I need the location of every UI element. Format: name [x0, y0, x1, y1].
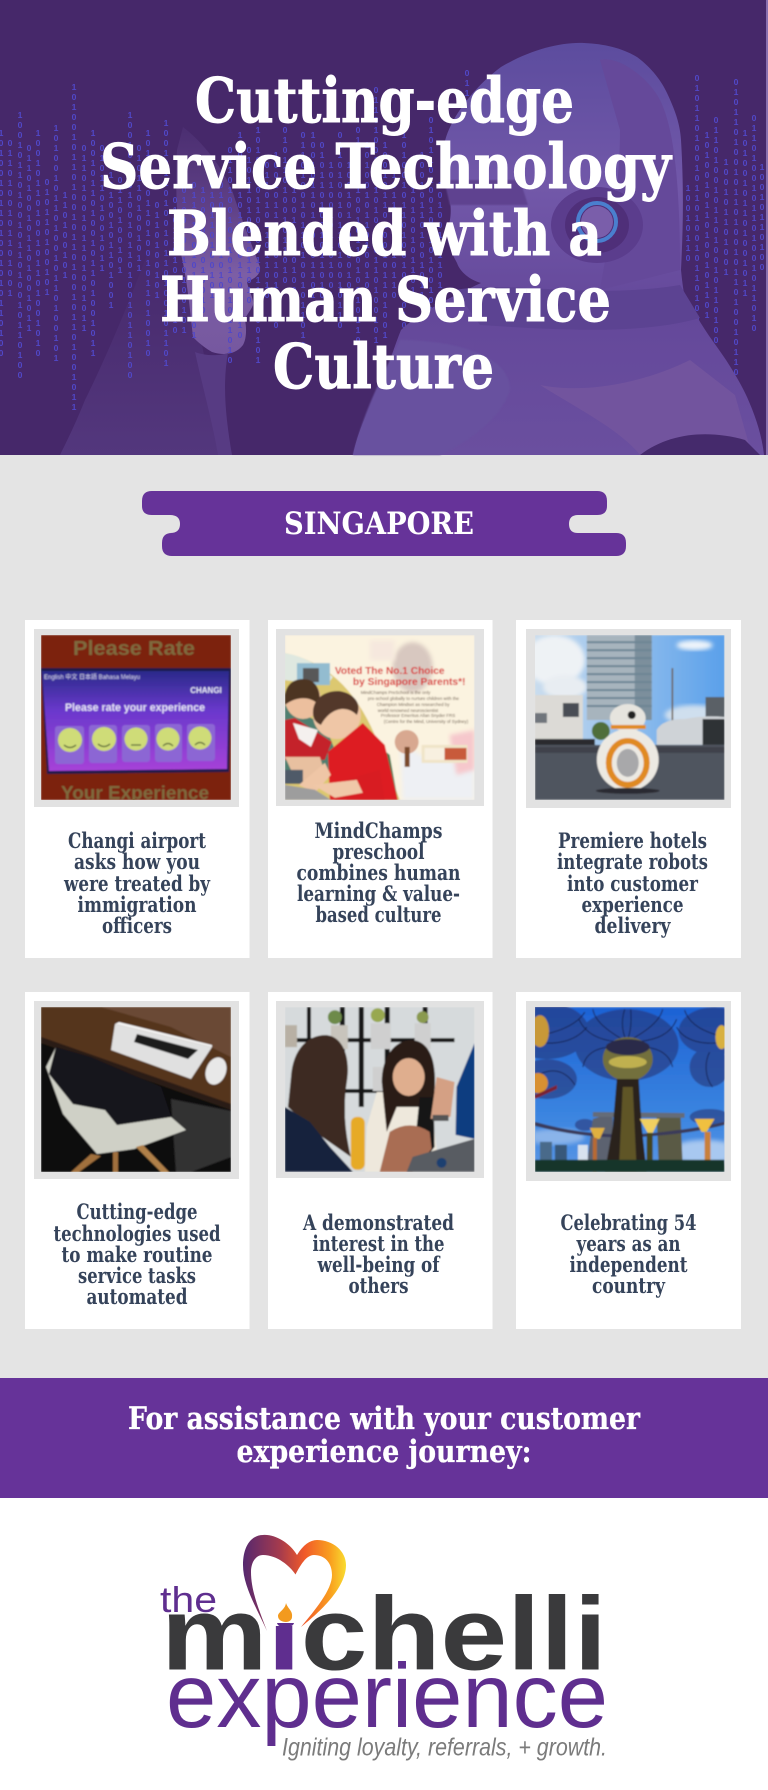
- photo: two women talking: [285, 1007, 474, 1172]
- card: Celebrating 54 years: [505, 992, 750, 1329]
- photo: airport rating screen: Please Rate: [73, 638, 195, 660]
- illustration: robot in profile: [353, 43, 764, 455]
- binary code columns: 0101101001011010: [317, 140, 327, 300]
- binary code columns: 0101101001011: [97, 143, 107, 273]
- binary code columns: 100101101001011010010: [235, 130, 245, 340]
- caption: A demonstrated: [302, 1211, 454, 1236]
- binary code columns: 0101101001011010: [280, 125, 290, 285]
- binary code columns: 010110100101: [42, 177, 52, 297]
- caption: Changi airport: [68, 829, 206, 854]
- photo: laptop on desk with chair: [41, 1007, 231, 1172]
- footer call to action: For assistance with your customer: [128, 1401, 641, 1437]
- binary code columns: 100101101001011010: [308, 130, 318, 310]
- binary code columns: 0110100101101001: [5, 138, 15, 298]
- binary code columns: 1001011010010110100101101: [161, 118, 171, 368]
- caption: independent: [570, 1253, 688, 1278]
- caption: others: [348, 1274, 408, 1299]
- caption: MindChamps: [314, 819, 442, 844]
- caption: combines human: [296, 861, 461, 886]
- binary code columns: 010110100101101001011010: [426, 115, 436, 355]
- title: [100, 64, 673, 403]
- illustration: woman in profile: [60, 127, 260, 455]
- title: Human Service: [160, 263, 611, 336]
- caption: years as an: [576, 1232, 681, 1257]
- caption: service tasks: [78, 1264, 196, 1289]
- binary code columns: 0110100101101001011010: [298, 130, 308, 350]
- photo: preschool children: [285, 635, 474, 800]
- photo: Gardens by the Bay supertrees: [535, 1007, 724, 1172]
- caption: to make routine: [62, 1243, 212, 1268]
- caption: [296, 819, 461, 928]
- binary code columns: 10010110100101: [344, 160, 354, 300]
- logo wordmark: michelli: michelli: [161, 1576, 607, 1692]
- logo tagline: Igniting loyalty, referrals, + growth.: [282, 1734, 607, 1762]
- binary code columns: 01101001011010010110100101: [371, 85, 381, 345]
- caption: into customer: [567, 872, 699, 897]
- binary code columns: 10010110100101101001011: [88, 128, 98, 358]
- hero panel: [0, 0, 768, 455]
- binary code columns: 101001011010010: [216, 170, 226, 320]
- caption: integrate robots: [557, 850, 708, 875]
- logo panel: [0, 1498, 768, 1790]
- binary code columns: 1010010110100101: [362, 140, 372, 300]
- binary code columns: 10010110100101101001: [380, 140, 390, 340]
- binary code columns: 10100101101001: [289, 165, 299, 305]
- binary code columns: 0110100101101001011010: [225, 145, 235, 365]
- caption: technologies used: [54, 1222, 220, 1247]
- caption: officers: [102, 914, 172, 939]
- binary code columns: 110100101: [60, 190, 70, 280]
- binary code columns: 01101001011010010110: [335, 130, 345, 330]
- binary code columns: 10100101101001: [326, 160, 336, 300]
- binary code columns: 100101101001011010: [271, 150, 281, 330]
- title: Blended with a: [167, 197, 602, 270]
- binary code columns: 0101101001011010010110100101101: [731, 77, 741, 387]
- card: Premiere hotels: [516, 620, 741, 958]
- card: MindChamps preschool: [268, 620, 492, 958]
- caption: [63, 829, 210, 939]
- binary code columns: 01101001011010010110100: [711, 115, 721, 345]
- caption: automated: [86, 1285, 188, 1310]
- photo: preschool children: by Singapore Parents*!: [353, 677, 466, 688]
- photo: preschool children: Voted The No.1 Choice: [335, 666, 445, 677]
- binary code columns: 01011010010110: [170, 195, 180, 335]
- caption: delivery: [594, 914, 671, 939]
- photo: BB-8 robot in car park: [535, 635, 724, 800]
- binary code columns: 0101101001011: [134, 143, 144, 273]
- binary code columns: 10010110100: [757, 162, 767, 272]
- binary code columns: 10100101101001011: [740, 128, 750, 298]
- title: Culture: [273, 330, 494, 403]
- caption: based culture: [316, 903, 442, 928]
- caption: interest in the: [312, 1232, 444, 1257]
- binary code columns: 0110100101101001: [189, 180, 199, 340]
- binary code columns: 101001011010010110100101101001011: [69, 82, 79, 412]
- binary code columns: 10100101101001: [435, 180, 445, 320]
- binary code columns: 0110100101: [152, 200, 162, 300]
- binary code columns: 0110100101101001011: [79, 143, 89, 333]
- binary code columns: 010110100101: [207, 180, 217, 300]
- photo: airport rating screen: English 中文 日本語 Bahasa Melayu: [44, 673, 140, 681]
- binary code columns: [0, 68, 767, 412]
- caption: [560, 1211, 697, 1299]
- caption: [302, 1211, 454, 1299]
- caption: asks how you: [74, 850, 200, 875]
- photo: airport rating screen: Your Experience: [61, 783, 209, 803]
- caption: Premiere hotels: [558, 829, 707, 854]
- caption: immigration: [78, 893, 197, 918]
- card: well-being of others: [268, 992, 492, 1329]
- logo wordmark: the: the: [160, 1579, 217, 1620]
- photo: preschool children: Champion Mindset as researched by: [377, 702, 450, 707]
- binary code columns: 010110100101101001011010010110: [692, 73, 702, 373]
- card: Cutting-edge technologies: [25, 992, 250, 1329]
- title: Service Technology: [100, 130, 673, 203]
- binary code columns: 01101001011010: [408, 165, 418, 305]
- photo: airport rating screen: CHANGI: [190, 686, 222, 695]
- icon: heart: [243, 1535, 346, 1631]
- caption: well-being of: [317, 1253, 441, 1278]
- caption: Celebrating 54: [560, 1211, 697, 1236]
- binary code columns: 0101101001011010: [244, 145, 254, 305]
- photo: preschool children: Professor Emeritus Allan Snyder FRS: [381, 713, 455, 718]
- photo: preschool children: pre-school globally to nurture children with the: [368, 696, 459, 701]
- binary code columns: 100101101001011010010110100: [125, 110, 135, 380]
- binary code columns: 1001011010010110: [417, 150, 427, 310]
- logo wordmark: experience: experience: [166, 1646, 608, 1747]
- binary code columns: 0101101001011010010110: [353, 125, 363, 345]
- binary code columns: 100101101001011010010110100: [15, 110, 25, 380]
- photo: preschool children: (Centre for the Mind, University of Sydney): [384, 719, 469, 724]
- caption: experience: [582, 893, 684, 918]
- binary code columns: 101001011010010110100101: [51, 123, 61, 363]
- caption: preschool: [332, 840, 424, 865]
- banner: Singapore: [142, 491, 626, 556]
- binary code columns: 1010010110100101101: [702, 130, 712, 320]
- binary code columns: 0110100101101001011010: [749, 113, 759, 333]
- banner: Singapore: SINGAPORE: [284, 506, 474, 542]
- binary code columns: 0110100101: [115, 175, 125, 275]
- binary code columns: 10100101101001: [106, 170, 116, 310]
- caption: country: [592, 1274, 665, 1299]
- icon: flame: [272, 1590, 300, 1627]
- caption: [54, 1200, 220, 1310]
- binary code columns: 0110: [462, 68, 472, 108]
- binary code columns: 01011010010110: [389, 160, 399, 300]
- caption: [557, 829, 708, 939]
- card: Changi airport: [25, 620, 250, 958]
- caption: Cutting-edge: [76, 1200, 198, 1225]
- binary code columns: 0110100101101001011: [24, 143, 34, 333]
- footer call to action: experience journey:: [236, 1434, 532, 1470]
- photo: preschool children: MindChamps PreSchool is the only: [361, 690, 431, 695]
- binary code columns: 10100101101001011010010: [143, 128, 153, 358]
- binary code columns: 10100101101001011010: [399, 130, 409, 330]
- footer call to action: [0, 1378, 768, 1498]
- photo: airport rating screen: [41, 635, 231, 803]
- binary code columns: 100101101001: [721, 157, 731, 277]
- caption: were treated by: [63, 872, 210, 897]
- binary code columns: 10010110100101101001010: [33, 128, 43, 358]
- binary code columns: 01101001011010: [262, 160, 272, 300]
- binary code columns: 1010010110100101: [179, 175, 189, 335]
- caption: learning & value-: [297, 882, 460, 907]
- title: Cutting-edge: [195, 64, 574, 137]
- binary code columns: 10010110: [683, 183, 693, 263]
- binary code columns: 1001011010010: [198, 185, 208, 315]
- photo: airport rating screen: Please rate your experience: [65, 702, 205, 714]
- photo: preschool children: world renowned neuroscientist: [378, 708, 439, 713]
- binary code columns: 101001011010010110100101: [253, 125, 263, 365]
